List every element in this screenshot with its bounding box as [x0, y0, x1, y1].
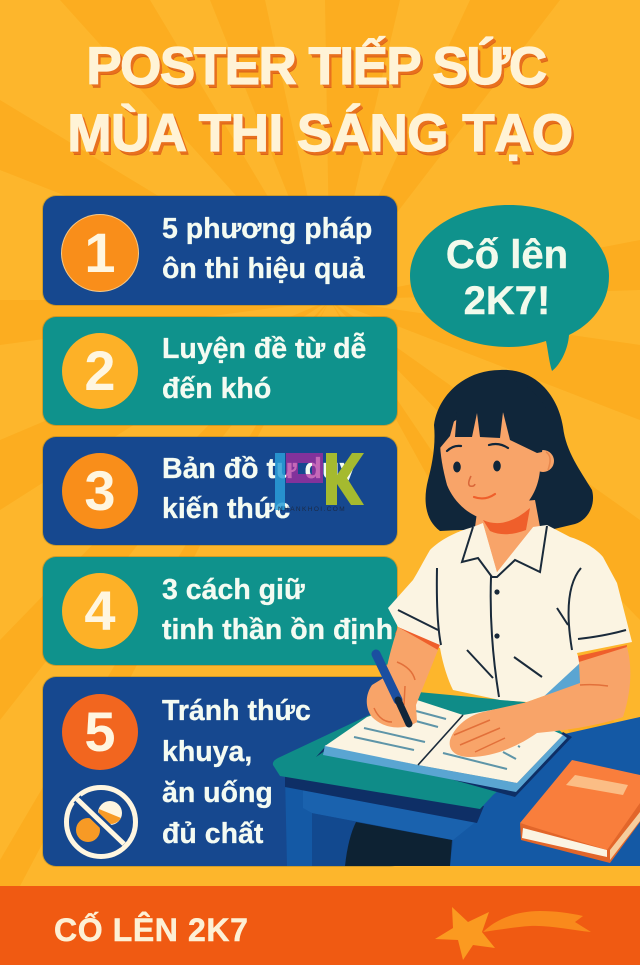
panel: step 1: [43, 196, 397, 305]
number badge 5: 5: [84, 700, 116, 763]
desk top: [273, 692, 565, 809]
step 1 text: ôn thi hiệu quả: [162, 253, 365, 285]
closed orange book: [520, 760, 640, 863]
title: MÙA THI SÁNG TẠO: [67, 104, 573, 163]
step 2 text: Luyện đề từ dễ: [162, 333, 366, 365]
panel: step 2: [43, 317, 397, 425]
head: [438, 376, 554, 521]
footer text: CỐ LÊN 2K7: [54, 912, 248, 948]
number badge 5: [62, 694, 138, 770]
bubble text: Cố lên: [446, 233, 568, 277]
icon: no pills: [64, 785, 138, 859]
panel: step 4: [43, 557, 397, 665]
right arm and hand: [450, 647, 630, 757]
step 4 text: tinh thần ồn định: [162, 614, 393, 646]
neck: [475, 500, 540, 572]
number badge 2: 2: [84, 339, 116, 402]
desk body: [285, 717, 640, 866]
number badge 4: [62, 573, 138, 649]
panel: step 5: [43, 677, 403, 866]
step 4 text: 3 cách giữ: [162, 574, 305, 606]
open book: [316, 700, 572, 797]
bubble text: 2K7!: [464, 279, 550, 323]
footer band: [0, 886, 640, 965]
step 2 text: [162, 332, 366, 405]
step 1 text: [162, 213, 372, 285]
number badge 3: 3: [84, 459, 116, 522]
step 4 text: [162, 574, 393, 646]
shirt: [388, 508, 632, 702]
number badge 4: 4: [84, 579, 116, 642]
number badge 1: 1: [84, 221, 116, 284]
sleeve cuffs: [395, 627, 627, 662]
step 3 text: Bản đồ tư duy: [162, 453, 355, 485]
panel: step 3: [43, 437, 397, 545]
left arm and hand: [367, 627, 438, 727]
title: POSTER TIẾP SỨC: [86, 37, 546, 96]
step 3 text: kiến thức: [162, 493, 290, 525]
number badge 1: [62, 215, 138, 291]
step 5 text: khuya,: [162, 736, 252, 768]
number badge 3: [62, 453, 138, 529]
step 2 text: đến khó: [162, 373, 271, 405]
watermark text: NHANKHOI.COM: [278, 506, 346, 513]
bubble text: [446, 233, 568, 323]
step 5 text: [162, 695, 311, 850]
number badge 2: [62, 333, 138, 409]
pen: [376, 654, 409, 724]
title: [67, 36, 574, 164]
step 5 text: Tránh thức: [162, 695, 311, 727]
hair back: [426, 370, 593, 531]
step 5 text: đủ chất: [162, 818, 263, 850]
step 3 text: [162, 453, 355, 525]
icon: shooting star: [435, 907, 591, 960]
step 1 text: 5 phương pháp: [162, 213, 372, 245]
watermark logo: [275, 453, 364, 513]
speech bubble: [410, 205, 609, 371]
step 5 text: ăn uống: [162, 777, 273, 809]
